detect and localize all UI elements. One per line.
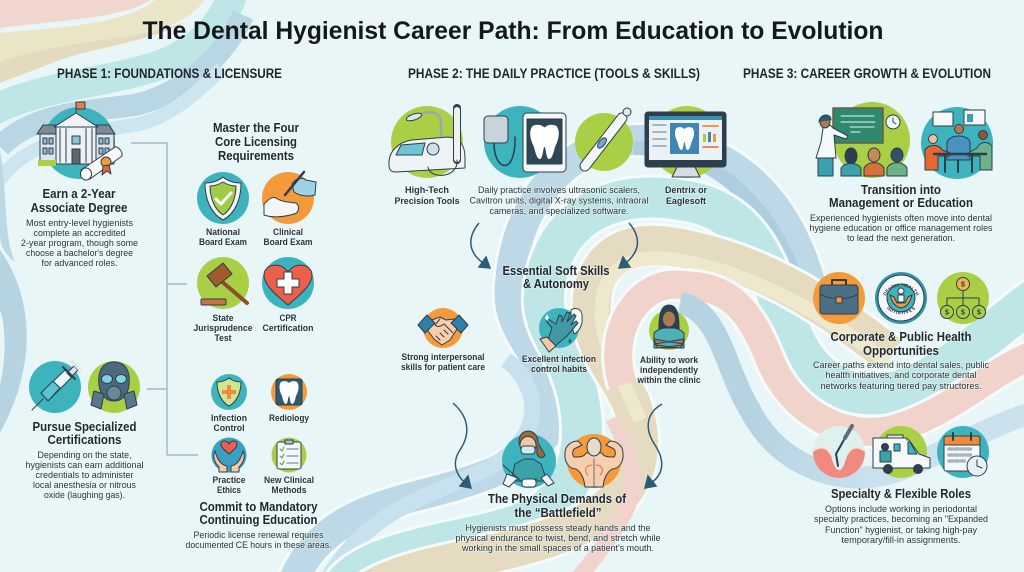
text: earn a 2-year associate degree: Earn a 2-Year <box>42 186 116 201</box>
icon: new clinical methods checklist <box>272 438 306 472</box>
text: physical demands of the battlefield: Hygienists must possess steady hands and the <box>466 523 650 534</box>
icon: tiered pay structure: $ <box>961 308 966 316</box>
text: earn a 2-year associate degree: for advanced roles. <box>42 258 118 269</box>
label: dentrix or eaglesoft <box>665 185 707 207</box>
label: excellent infection control habits: Excellent infection <box>522 354 596 365</box>
label: state jurisprudence test: Jurisprudence <box>194 323 252 334</box>
label: infection control: Control <box>214 423 244 434</box>
icon: briefcase <box>813 272 865 324</box>
label: high-tech precision tools <box>394 185 460 207</box>
text: physical demands of the battlefield: working in the small spaces of a patient's mouth. <box>461 543 654 554</box>
text: transition into management or education: to lead the next generation. <box>847 233 955 244</box>
text: daily practice description: cameras, and specialized software. <box>490 206 628 217</box>
connector lines <box>131 143 198 455</box>
text: commit to mandatory continuing education <box>186 499 332 551</box>
label: clinical board exam <box>264 227 312 248</box>
text: transition into management or education <box>810 182 993 244</box>
heading: essential soft skills and autonomy <box>502 263 610 291</box>
text: specialty and flexible roles: temporary/fill-in assignments. <box>842 535 960 546</box>
text: physical demands of the battlefield: the “Battlefield” <box>514 505 602 520</box>
heading: master the four core licensing requirements: Requirements <box>218 148 294 163</box>
text: transition into management or education: Experienced hygienists often move into dental <box>810 213 992 224</box>
icon: x-ray sensor and tablet <box>484 106 566 178</box>
label: dentrix or eaglesoft: Dentrix or <box>665 185 707 196</box>
icon: state jurisprudence gavel <box>197 257 249 309</box>
phase 2 heading: PHASE 2: THE DAILY PRACTICE (TOOLS & SKILLS) <box>408 66 700 81</box>
text: specialty and flexible roles: Options include working in periodontal <box>825 504 977 515</box>
heading: master the four core licensing requirements: Core Licensing <box>215 134 297 149</box>
icon: team meeting <box>921 107 993 179</box>
label: dentrix or eaglesoft: Eaglesoft <box>666 196 707 207</box>
icon: college building and diploma <box>37 102 122 180</box>
icon: gas mask <box>88 361 140 413</box>
icon: gloved hand wiping <box>539 308 582 352</box>
label: ability to work independently <box>637 355 700 386</box>
icon: tiered pay structure: $ <box>945 308 950 316</box>
icon: ultrasonic scaler machine <box>389 106 465 178</box>
label: new clinical methods <box>264 475 314 496</box>
label: cpr certification <box>262 313 314 334</box>
label: clinical board exam: Board Exam <box>264 237 312 248</box>
text: pursue specialized certifications: hygienists can earn additional <box>26 460 144 471</box>
icon: tiered pay structure: $ <box>977 308 982 316</box>
icon: dental software monitor <box>645 106 726 178</box>
heading: essential soft skills and autonomy: & Autonomy <box>523 276 590 291</box>
text: physical demands of the battlefield: The Physical Demands of <box>488 491 627 506</box>
label: national board exam <box>199 227 247 248</box>
text: earn a 2-year associate degree: Associate Degree <box>30 200 128 215</box>
icon: radiology tooth x-ray <box>271 374 307 410</box>
label: excellent infection control habits <box>522 354 596 375</box>
text: commit to mandatory continuing education: Periodic license renewal requires <box>194 530 324 541</box>
text: corporate and public health opportunities: networks featuring tiered pay structores. <box>820 381 982 392</box>
icon: mobile dental van <box>873 426 930 478</box>
text: physical demands of the battlefield: physical endurance to twist, bend, and stretch while <box>456 533 660 544</box>
text: earn a 2-year associate degree: Most entry-level hygienists <box>26 218 133 229</box>
label: ability to work independently: independently <box>640 365 699 376</box>
label: strong interpersonal skills <box>401 352 485 373</box>
text: earn a 2-year associate degree: 2-year program, though some <box>21 238 138 249</box>
text: pursue specialized certifications: Certifications <box>48 432 122 447</box>
text: pursue specialized certifications <box>26 419 144 501</box>
icon: periodontal gum probe <box>813 426 865 478</box>
label: state jurisprudence test: Test <box>214 333 232 344</box>
icon: cpr certification heart <box>262 257 314 309</box>
label: state jurisprudence test: State <box>212 313 234 324</box>
arrow: soft skills to physical demands left <box>453 403 471 488</box>
text: commit to mandatory continuing education: Continuing Education <box>200 512 318 527</box>
icon: tiered pay structure <box>937 272 989 324</box>
label: infection control <box>211 413 247 434</box>
heading: master the four core licensing requirements: Master the Four <box>213 120 299 135</box>
icon: clinical board exam hands <box>262 172 316 224</box>
text: transition into management or education: Transition into <box>861 182 941 197</box>
text: specialty and flexible roles: Function" hygienist, or taking high-pay <box>825 525 977 536</box>
label: new clinical methods: Methods <box>272 485 306 496</box>
label: practice ethics <box>212 475 246 496</box>
label: excellent infection control habits: control habits <box>531 364 587 375</box>
label: high-tech precision tools: Precision Tools <box>394 196 460 207</box>
text: physical demands of the battlefield <box>456 491 660 554</box>
text: pursue specialized certifications: Pursue Specialized <box>32 419 137 434</box>
text: corporate and public health opportunities <box>813 329 989 392</box>
title: The Dental Hygienist Career Path: From Education to Evolution <box>142 17 884 45</box>
label: practice ethics: Ethics <box>217 485 241 496</box>
label: cpr certification: Certification <box>262 323 314 334</box>
icon: calendar and clock <box>937 426 989 478</box>
icon: dental health seal badge: INITIATIVES <box>886 306 915 314</box>
text: daily practice description: Cavitron units, digital X-ray systems, intraoral <box>470 196 648 206</box>
label: ability to work independently: within the clinic <box>637 375 700 386</box>
icon: dental health seal badge <box>875 272 927 324</box>
label: ability to work independently: Ability to work <box>640 355 699 366</box>
text: corporate and public health opportunities: health initiatives, and corporate dental <box>826 370 976 381</box>
icon: infection control shield <box>211 374 247 410</box>
text: pursue specialized certifications: oxide (laughing gas). <box>44 490 125 501</box>
label: cpr certification: CPR <box>280 313 297 324</box>
icon: teacher at chalkboard <box>816 102 910 178</box>
label: practice ethics: Practice <box>212 475 246 486</box>
label: clinical board exam: Clinical <box>273 227 303 238</box>
icon: practice ethics hands and heart <box>212 438 246 472</box>
panel: phase 3 career growth and evolution <box>743 66 993 546</box>
panel: phase 2 the daily practice <box>389 66 726 554</box>
text: corporate and public health opportunities: Career paths extend into dental sales, public <box>813 360 989 371</box>
label: state jurisprudence test <box>194 313 252 344</box>
label: national board exam: Board Exam <box>199 237 247 248</box>
icon: national board exam shield <box>197 172 249 224</box>
label: radiology: Rediology <box>269 413 310 424</box>
icon: back and muscles <box>565 434 623 488</box>
text: commit to mandatory continuing education: documented CE hours in these areas. <box>186 540 332 551</box>
heading: master the four core licensing requirements <box>213 120 299 163</box>
text: corporate and public health opportunities: Opportunities <box>863 343 939 358</box>
arrow: soft skills to physical demands right <box>645 404 662 488</box>
text: earn a 2-year associate degree: complete an accredited <box>34 228 126 239</box>
text: transition into management or education: hygiene education or office management roles <box>810 223 993 234</box>
text: specialty and flexible roles: specialty practices, becoming an "Expanded <box>814 514 988 525</box>
text: pursue specialized certifications: local anesthesia or nitrous <box>33 480 136 491</box>
phase 3 heading: PHASE 3: CAREER GROWTH & EVOLUTION <box>743 66 991 81</box>
panel: phase 1 foundations and licensure <box>21 66 332 551</box>
label: new clinical methods: New Clinical <box>264 475 314 486</box>
icon: handshake <box>418 308 468 348</box>
text: specialty and flexible roles: Specialty & Flexible Roles <box>831 486 971 501</box>
icon: intraoral camera <box>575 108 633 171</box>
label: strong interpersonal skills: skills for patient care <box>401 362 485 373</box>
arrow: tools to soft skills left <box>471 223 490 268</box>
text: daily practice description: Daily practice involves ultrasonic scalers, <box>478 185 640 196</box>
arrow: tools to soft skills right <box>619 223 637 268</box>
text: daily practice description <box>470 185 648 217</box>
label: strong interpersonal skills: Strong interpersonal <box>402 352 484 363</box>
icon: independent hygienist with crossed arms <box>649 305 689 350</box>
text: pursue specialized certifications: credentials to administer <box>36 470 134 481</box>
icon: hygienist working <box>502 431 556 488</box>
text: commit to mandatory continuing education: Commit to Mandatory <box>200 499 318 514</box>
text: pursue specialized certifications: Depending on the state, <box>38 450 132 461</box>
icon: dental health seal badge: DENTAL HEALTH <box>883 283 919 296</box>
label: high-tech precision tools: High-Tech <box>405 185 449 196</box>
text: transition into management or education: Management or Education <box>829 195 973 210</box>
label: infection control: Infection <box>211 413 247 424</box>
label: national board exam: National <box>206 227 240 238</box>
text: earn a 2-year associate degree <box>21 186 138 269</box>
icon: tiered pay structure: $ <box>961 280 966 288</box>
text: specialty and flexible roles <box>814 486 988 546</box>
text: corporate and public health opportunities: Corporate & Public Health <box>830 329 972 344</box>
text: earn a 2-year associate degree: choose a bachelor's degree <box>26 248 133 259</box>
heading: essential soft skills and autonomy: Essential Soft Skills <box>502 263 610 278</box>
icon: syringe <box>29 361 81 413</box>
phase 1 heading: PHASE 1: FOUNDATIONS & LICENSURE <box>57 66 282 81</box>
